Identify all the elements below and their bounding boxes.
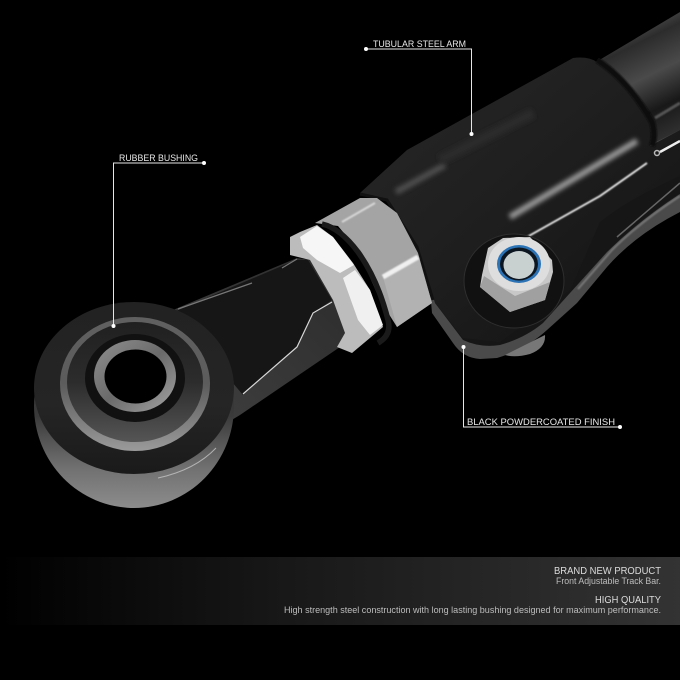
- lock nut with blue insert: [480, 237, 553, 312]
- eye outer body: [34, 304, 234, 508]
- callout: black powdercoated finish: [462, 345, 622, 429]
- text: high strength description: High strength steel construction with long lasting bushing designed for maximum performance.: [284, 605, 661, 615]
- bottom description band: [0, 557, 680, 625]
- metal sleeve: [94, 340, 176, 412]
- text: front adjustable track bar: Front Adjustable Track Bar.: [556, 576, 661, 586]
- heading: brand new product: BRAND NEW PRODUCT: [554, 566, 661, 577]
- callout: tubular steel arm: TUBULAR STEEL ARM: [373, 39, 466, 50]
- bracket bolt recess: [464, 234, 564, 328]
- callout: rubber bushing: RUBBER BUSHING: [119, 153, 198, 164]
- lower bracket plate: [430, 130, 680, 359]
- heading: high quality: HIGH QUALITY: [595, 595, 661, 606]
- lock washer: [322, 224, 389, 343]
- callout: rubber bushing: [112, 153, 206, 328]
- callout: black powdercoated finish: BLACK POWDERCOATED FINISH: [467, 417, 615, 428]
- eye top face: [34, 302, 234, 474]
- rubber bushing eye: [34, 302, 234, 508]
- center hole: [104, 350, 166, 404]
- large adjuster nut: [315, 198, 432, 327]
- rubber insert: [67, 322, 203, 442]
- track bar product illustration: [34, 12, 680, 508]
- black housing sleeve: [360, 58, 680, 342]
- upper steel tube: [596, 12, 680, 150]
- callout: tubular steel arm: [364, 39, 474, 136]
- gray seal ring: [60, 317, 210, 451]
- forged arm link: [173, 258, 345, 430]
- jam nut: [290, 225, 383, 353]
